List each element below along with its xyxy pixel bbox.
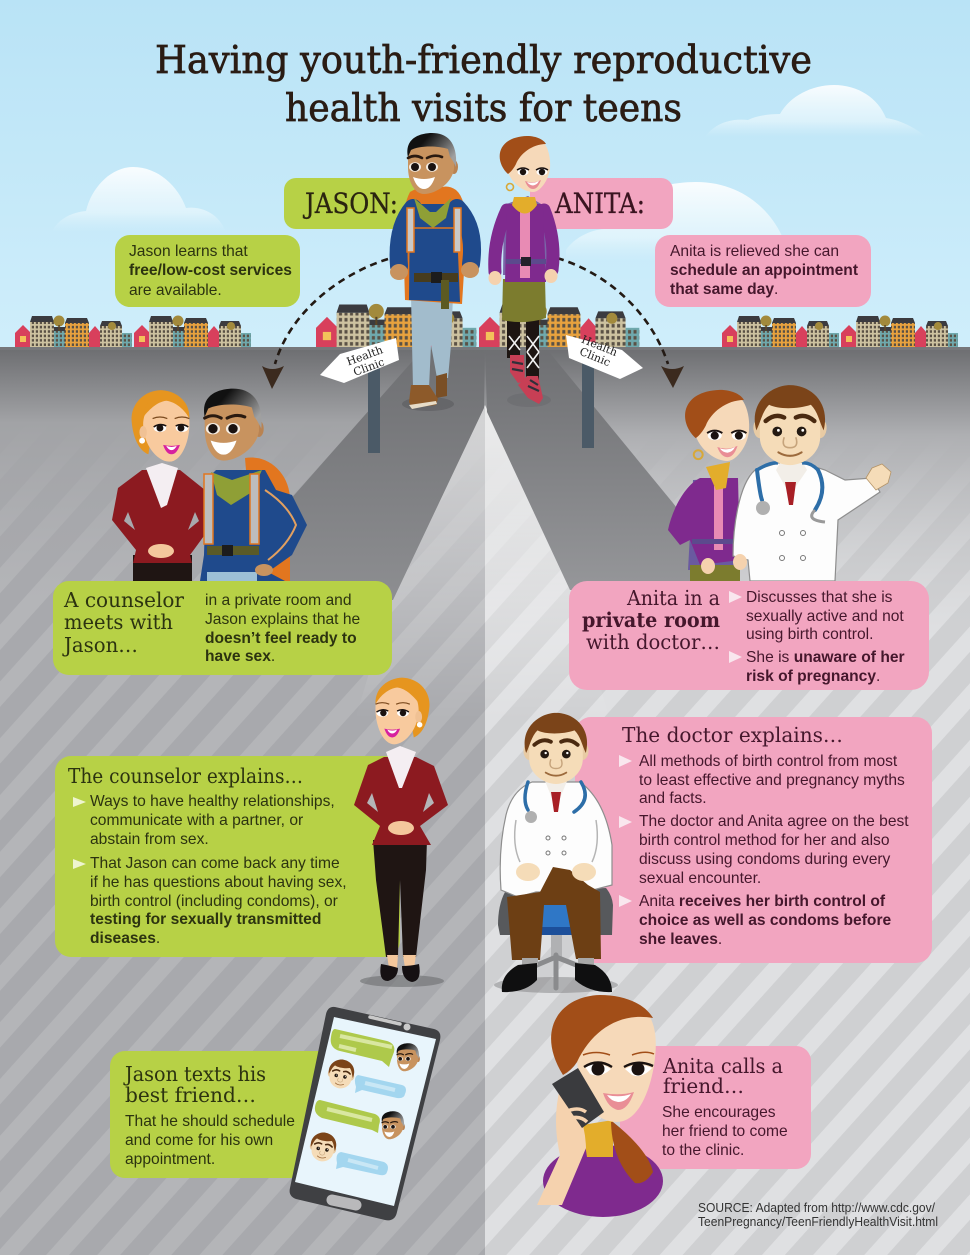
- Anita callout: same-day appointment: that same day.: [670, 281, 778, 298]
- left health clinic sign: [320, 338, 399, 453]
- bullet list: abstain from sex.: [90, 831, 209, 848]
- bullet list: That Jason can come back any time: [90, 855, 340, 872]
- heading: best friend…: [125, 1083, 256, 1107]
- ground with striped road surfaces: [0, 347, 970, 1255]
- Anita callout: same-day appointment: schedule an appointment: [670, 262, 858, 279]
- chat faces: [308, 1043, 420, 1164]
- bullet list: She is unaware of her: [746, 649, 905, 666]
- Jason callout: services: free/low-cost services: [129, 262, 292, 279]
- Anita name label: ANITA:: [554, 187, 645, 220]
- source note: SOURCE: Adapted from http://www.cdc.gov/: [698, 1201, 936, 1215]
- bullet list: communicate with a partner, or: [90, 812, 303, 829]
- Jason name label: JASON:: [302, 187, 398, 220]
- heading: Anita in a: [626, 586, 720, 610]
- body text: doesn’t feel ready to: [205, 630, 357, 647]
- town skyline: left: [15, 316, 251, 347]
- bullet list: using birth control.: [746, 626, 873, 643]
- body text: and come for his own: [125, 1132, 273, 1149]
- arrow: dashed curve to doctor: [557, 258, 684, 388]
- body text: appointment.: [125, 1151, 215, 1168]
- heading: with doctor…: [586, 630, 720, 654]
- town skyline: right: [722, 316, 958, 347]
- character: Jason walking: [390, 133, 479, 411]
- sky background: [0, 0, 970, 348]
- clouds: [52, 85, 926, 262]
- panel: Jason texts his best friend: [110, 1051, 350, 1178]
- heading: Anita calls a: [662, 1054, 783, 1078]
- panel: Anita in a private room: [569, 581, 929, 690]
- bullet list: All methods of birth control from most: [639, 753, 898, 770]
- heading: [62, 588, 184, 657]
- bullet list: and facts.: [639, 790, 707, 807]
- heading: [582, 586, 720, 654]
- bullet list: choice as well as condoms before: [639, 912, 892, 929]
- body text: in a private room and: [205, 592, 352, 609]
- heading: private room: [582, 608, 720, 632]
- left health clinic sign: Clinic: [352, 356, 386, 379]
- right health clinic sign: [566, 333, 643, 448]
- body text: [662, 1104, 788, 1159]
- body text: [205, 592, 360, 665]
- bullet list: birth control (including condoms), or: [90, 893, 338, 910]
- Anita callout: same-day appointment: Anita is relieved she can: [670, 243, 839, 260]
- body text: have sex.: [205, 648, 275, 665]
- heading: The counselor explains…: [68, 764, 303, 788]
- panel: Anita calls a friend: [620, 1046, 811, 1169]
- bullet list: diseases.: [90, 930, 160, 947]
- title: [155, 38, 812, 130]
- bullet list: if he has questions about having sex,: [90, 874, 347, 891]
- bullet list: The doctor and Anita agree on the best: [639, 813, 909, 830]
- bullet list: sexually active and not: [746, 608, 904, 625]
- panel: the doctor explains: [575, 717, 932, 963]
- doctor bust: [733, 385, 891, 581]
- bullet list: risk of pregnancy.: [746, 668, 880, 685]
- Jason callout: services: [115, 235, 300, 307]
- character: seated doctor: [494, 713, 618, 993]
- character: counselor standing: [354, 678, 448, 987]
- panel: a counselor meets with Jason: [53, 581, 392, 675]
- title: health visits for teens: [285, 86, 682, 130]
- title: Having youth-friendly reproductive: [155, 38, 812, 82]
- Jason callout: services: Jason learns that: [129, 243, 248, 260]
- character: Anita on the phone: [537, 995, 663, 1217]
- heading: Jason…: [62, 633, 138, 657]
- bullet list: Anita receives her birth control of: [639, 893, 886, 910]
- heading: The doctor explains…: [622, 723, 843, 747]
- Anita callout: same-day appointment: [655, 235, 871, 307]
- Jason bust: [200, 389, 307, 581]
- chat bubbles: [315, 1029, 406, 1175]
- body text: [125, 1113, 295, 1168]
- bullet list: testing for sexually transmitted: [90, 911, 321, 928]
- bullet list: Ways to have healthy relationships,: [90, 793, 335, 810]
- heading: friend…: [663, 1074, 744, 1098]
- bullet list: [619, 753, 909, 948]
- source note: TeenPregnancy/TeenFriendlyHealthVisit.html: [698, 1215, 938, 1229]
- body text: She encourages: [662, 1104, 776, 1121]
- arrow: dashed curve to counselor: [262, 259, 388, 389]
- heading: Jason texts his: [123, 1062, 266, 1086]
- Anita name label: [530, 178, 673, 229]
- panel: Anita and doctor illustration: [668, 385, 891, 581]
- Jason callout: services: are available.: [129, 282, 222, 299]
- left health clinic sign: Health: [345, 343, 385, 368]
- panel: counselor meets with Jason illustration: [112, 389, 307, 581]
- right health clinic sign: Clinic: [578, 345, 612, 369]
- body text: her friend to come: [662, 1123, 788, 1140]
- heading: [123, 1062, 266, 1107]
- bullet list: birth control method for her and also: [639, 832, 890, 849]
- body text: That he should schedule: [125, 1113, 295, 1130]
- Jason name label: [284, 178, 424, 229]
- character: Anita walking: [488, 136, 558, 407]
- bullet list: sexual encounter.: [639, 870, 761, 887]
- town skyline: centre: [316, 304, 639, 347]
- bullet list: Discusses that she is: [746, 589, 893, 606]
- bullet list: discuss using condoms during every: [639, 851, 891, 868]
- Anita bust: [668, 390, 749, 581]
- counselor bust: [112, 390, 212, 581]
- bullet list: [73, 793, 347, 947]
- chair: [498, 888, 613, 988]
- source note: [698, 1201, 938, 1229]
- icon: smartphone with text conversation: [290, 1007, 440, 1220]
- heading: meets with: [64, 610, 173, 634]
- heading: [662, 1054, 783, 1098]
- bullet list: she leaves.: [639, 931, 722, 948]
- heading: A counselor: [63, 588, 184, 612]
- right health clinic sign: Health: [580, 333, 619, 359]
- body text: Jason explains that he: [205, 611, 360, 628]
- bullet list: [729, 589, 905, 685]
- body text: to the clinic.: [662, 1142, 744, 1159]
- panel: the counselor explains: [55, 756, 400, 957]
- bullet list: to least effective and pregnancy myths: [639, 772, 905, 789]
